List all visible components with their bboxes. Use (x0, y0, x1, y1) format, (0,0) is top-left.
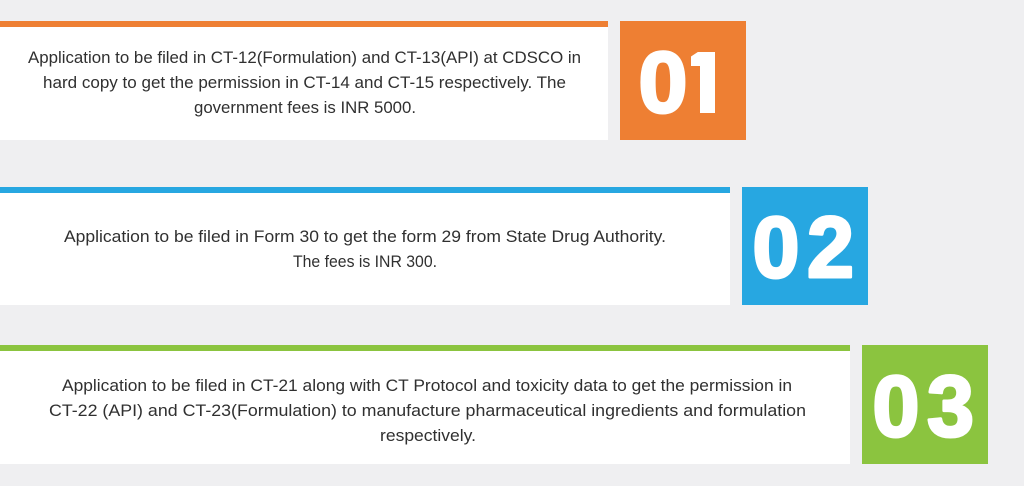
step 1 description: Application to be filed in CT-12(Formulation) and CT-13(API) at CDSCO in (28, 49, 581, 67)
step 1 number badge: 0 (638, 35, 688, 131)
step 1 number badge (620, 21, 746, 140)
step 3 card (0, 345, 850, 464)
step 2 card (0, 187, 730, 305)
panel: step 3 (0, 345, 988, 464)
step 2 description (64, 228, 666, 271)
step 2 blue top bar (0, 187, 730, 193)
step 2 number badge: 0 (752, 200, 800, 296)
step 3 number badge: 0 (872, 359, 920, 455)
step 2 description: Application to be filed in Form 30 to get the form 29 from State Drug Authority. (64, 228, 666, 246)
step 3 description: CT-22 (API) and CT-23(Formulation) to manufacture pharmaceutical ingredients and formulation (49, 402, 806, 420)
step 2 number badge (742, 187, 868, 305)
step 2 number badge: 2 (807, 200, 854, 296)
step 1 card (0, 21, 608, 140)
step 1 description (28, 49, 581, 117)
panel: step 1 (0, 21, 746, 140)
step 3 description: Application to be filed in CT-21 along with CT Protocol and toxicity data to get the permission in (62, 377, 792, 395)
step 3 description: respectively. (380, 427, 476, 445)
step 3 number badge: 3 (927, 359, 974, 455)
step 3 description (49, 377, 806, 445)
step 3 number badge (862, 345, 988, 464)
step 2 description: The fees is INR 300. (293, 253, 437, 271)
step 1 number badge: 1 (681, 35, 729, 131)
panel: step 2 (0, 187, 868, 305)
step 1 description: government fees is INR 5000. (194, 99, 416, 117)
step 1 description: hard copy to get the permission in CT-14 and CT-15 respectively. The (43, 74, 566, 92)
step 3 green top bar (0, 345, 850, 351)
step 1 orange top bar (0, 21, 608, 27)
